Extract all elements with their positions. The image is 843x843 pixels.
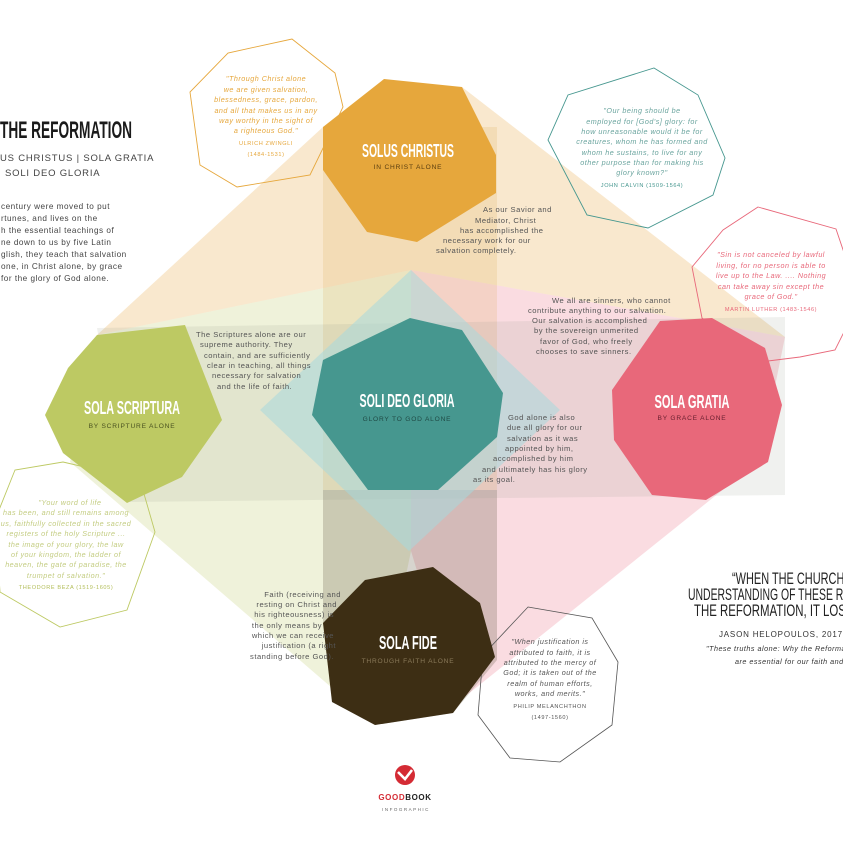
panel: Sola Fide: THROUGH FAITH ALONE bbox=[362, 658, 454, 665]
quote: Zwingli: we are given salvation, bbox=[224, 85, 308, 94]
quote: Calvin: whom he sustains, to live for any bbox=[582, 148, 702, 157]
quote: Zwingli: ULRICH ZWINGLI bbox=[239, 141, 293, 147]
title: US CHRISTUS | SOLA GRATIA bbox=[0, 153, 154, 164]
text: Sola Scriptura description: supreme authority. They bbox=[200, 340, 293, 349]
title bbox=[0, 117, 154, 179]
quote: Beza: registers of the holy Scripture ... bbox=[7, 529, 125, 538]
text: Soli Deo Gloria description: salvation as it was bbox=[507, 434, 578, 443]
text: Sola Fide description: the only means by bbox=[252, 621, 322, 630]
quote: Beza: heaven, the gate of paradise, the bbox=[5, 560, 127, 569]
text: Sola Fide description: standing before God). bbox=[250, 652, 334, 661]
panel: Sola Scriptura bbox=[45, 325, 222, 503]
text: Soli Deo Gloria description: appointed by him, bbox=[505, 444, 573, 453]
text: Sola Gratia description: contribute anything to our salvation. bbox=[528, 306, 666, 315]
quote: Beza bbox=[0, 462, 155, 627]
panel: Sola Fide: SOLA FIDE bbox=[379, 633, 437, 653]
panel: Sola Scriptura: BY SCRIPTURE ALONE bbox=[89, 423, 175, 430]
text: Soli Deo Gloria description: due all glory for our bbox=[507, 423, 583, 432]
quote: Calvin: glory known?" bbox=[616, 168, 668, 177]
intro text: one, in Christ alone, by grace bbox=[1, 262, 122, 271]
text: Soli Deo Gloria description: as its goal. bbox=[473, 475, 515, 484]
quote: Zwingli: blessedness, grace, pardon, bbox=[214, 95, 318, 104]
text: Solus Christus description: As our Savior and bbox=[483, 205, 552, 214]
quote: Calvin: JOHN CALVIN (1509-1564) bbox=[601, 183, 683, 189]
quote: Luther: can take away sin except the bbox=[718, 282, 824, 291]
text: Sola Fide description: his righteousness) is bbox=[254, 610, 334, 619]
text: Solus Christus description: has accomplished the bbox=[460, 226, 543, 235]
text: Sola Gratia description: by the sovereign unmerited bbox=[534, 326, 639, 335]
quote: Luther: live up to the Law. .... Nothing bbox=[716, 271, 826, 280]
text: Sola Gratia description bbox=[528, 296, 671, 356]
text: Sola Fide description: justification (a right bbox=[261, 641, 336, 650]
quote: Melanchthon bbox=[478, 607, 618, 762]
quote: Zwingli: way worthy in the sight of bbox=[219, 116, 313, 125]
panel: Sola Gratia bbox=[612, 318, 782, 500]
panel: Solus Christus bbox=[323, 79, 496, 242]
intro text: rtunes, and lives on the bbox=[1, 214, 98, 223]
quote: Beza: of your kingdom, the ladder of bbox=[11, 550, 122, 559]
logo: GoodBook: GOODBOOK bbox=[378, 793, 432, 802]
panel: Sola Gratia: BY GRACE ALONE bbox=[658, 415, 726, 422]
text: Sola Scriptura description: clear in teaching, all things bbox=[207, 361, 311, 370]
panel: Sola Fide bbox=[323, 567, 495, 725]
quote: Melanchthon: PHILIP MELANCHTHON bbox=[513, 704, 587, 710]
text: Solus Christus description bbox=[436, 205, 552, 255]
text: Sola Gratia description: We all are sinners, who cannot bbox=[552, 296, 671, 305]
quote: Luther: grace of God." bbox=[744, 292, 798, 301]
quote: Melanchthon: works, and merits." bbox=[515, 689, 585, 698]
quote: Beza: has been, and still remains among bbox=[3, 508, 129, 517]
text: Sola Scriptura description bbox=[196, 330, 311, 391]
quote: Melanchthon: realm of human efforts, bbox=[507, 679, 593, 688]
text: Solus Christus description: salvation completely. bbox=[436, 246, 516, 255]
translucent beams bbox=[70, 87, 785, 725]
callout: Helopoulos quote: JASON HELOPOULOS, 2017 bbox=[719, 630, 843, 639]
quote: Beza: us, faithfully collected in the sacred bbox=[1, 519, 132, 528]
quote: Luther: living, for no person is able to bbox=[716, 261, 826, 270]
title: SOLI DEO GLORIA bbox=[5, 168, 100, 179]
quote: Zwingli bbox=[190, 39, 343, 187]
panel: Solus Christus: SOLUS CHRISTUS bbox=[362, 141, 454, 161]
text: Sola Scriptura description: and the life of faith. bbox=[217, 382, 292, 391]
text: Sola Gratia description: chooses to save sinners. bbox=[536, 347, 632, 356]
quote: Beza: THEODORE BEZA (1519-1605) bbox=[19, 585, 113, 591]
intro text: for the glory of God alone. bbox=[1, 274, 109, 283]
text: Sola Gratia description: Our salvation is accomplished bbox=[532, 316, 647, 325]
quote: Melanchthon: God; it is taken out of the bbox=[503, 668, 597, 677]
quote: Zwingli: and all that makes us in any bbox=[214, 106, 318, 115]
quote: Calvin: creatures, whom he has formed and bbox=[576, 137, 708, 146]
intro text: century were moved to put bbox=[1, 202, 110, 211]
quote: Melanchthon: attributed to the mercy of bbox=[504, 658, 597, 667]
logo: GoodBook bbox=[378, 765, 432, 812]
quote: Calvin: employed for [God's] glory: for bbox=[586, 117, 698, 126]
text: Solus Christus description: necessary work for our bbox=[443, 236, 531, 245]
quote: Beza: trumpet of salvation." bbox=[27, 571, 105, 580]
text: Sola Fide description: resting on Christ and bbox=[256, 600, 337, 609]
text: Sola Scriptura description: contain, and are sufficiently bbox=[204, 351, 310, 360]
panel: Soli Deo Gloria bbox=[312, 318, 503, 490]
text: Sola Scriptura description: necessary for salvation bbox=[212, 371, 301, 380]
quote: Beza: "Your word of life bbox=[38, 498, 102, 507]
intro text: h the essential teachings of bbox=[1, 226, 114, 235]
title: THE REFORMATION bbox=[0, 117, 132, 144]
quote: Luther: "Sin is not canceled by lawful bbox=[717, 250, 825, 259]
quote: Melanchthon: (1497-1560) bbox=[531, 715, 569, 721]
text: Sola Scriptura description: The Scriptures alone are our bbox=[196, 330, 306, 339]
panel: Solus Christus: IN CHRIST ALONE bbox=[374, 164, 442, 171]
quote: Luther: MARTIN LUTHER (1483-1546) bbox=[725, 307, 817, 313]
intro text: ne down to us by five Latin bbox=[1, 238, 111, 247]
intro text bbox=[1, 202, 127, 283]
text: Soli Deo Gloria description bbox=[473, 413, 588, 484]
panel: Soli Deo Gloria: SOLI DEO GLORIA bbox=[360, 391, 454, 411]
panel: Sola Scriptura: SOLA SCRIPTURA bbox=[84, 398, 180, 418]
text: Sola Fide description bbox=[250, 590, 341, 661]
quote: Zwingli: a righteous God." bbox=[234, 126, 298, 135]
quote: Beza: the image of your glory, the law bbox=[8, 540, 124, 549]
quote: Zwingli: "Through Christ alone bbox=[226, 74, 306, 83]
panel: Sola Gratia: SOLA GRATIA bbox=[654, 392, 730, 412]
panel: Soli Deo Gloria: GLORY TO GOD ALONE bbox=[363, 416, 451, 423]
quote: Calvin bbox=[548, 68, 725, 228]
text: Soli Deo Gloria description: God alone is also bbox=[508, 413, 575, 422]
quote: Calvin: how unreasonable would it be for bbox=[581, 127, 703, 136]
text: Solus Christus description: Mediator, Christ bbox=[475, 216, 537, 225]
intro text: glish, they teach that salvation bbox=[1, 250, 127, 259]
text: Soli Deo Gloria description: accomplished by him bbox=[493, 454, 573, 463]
quote: Luther bbox=[692, 207, 843, 362]
text: Sola Fide description: Faith (receiving and bbox=[264, 590, 341, 599]
text: Sola Fide description: which we can receive bbox=[251, 631, 334, 640]
quote: Melanchthon: attributed to faith, it is bbox=[509, 648, 591, 657]
quote: Calvin: other purpose than for making his bbox=[580, 158, 704, 167]
logo: GoodBook: INFOGRAPHIC bbox=[382, 807, 430, 812]
quote: Calvin: "Our being should be bbox=[603, 106, 681, 115]
callout: Helopoulos quote bbox=[688, 569, 843, 666]
text: Soli Deo Gloria description: and ultimately has his glory bbox=[482, 465, 588, 474]
text: Sola Gratia description: favor of God, who freely bbox=[540, 337, 633, 346]
quote: Melanchthon: "When justification is bbox=[511, 637, 589, 646]
quote: Zwingli: (1484-1531) bbox=[247, 152, 285, 158]
